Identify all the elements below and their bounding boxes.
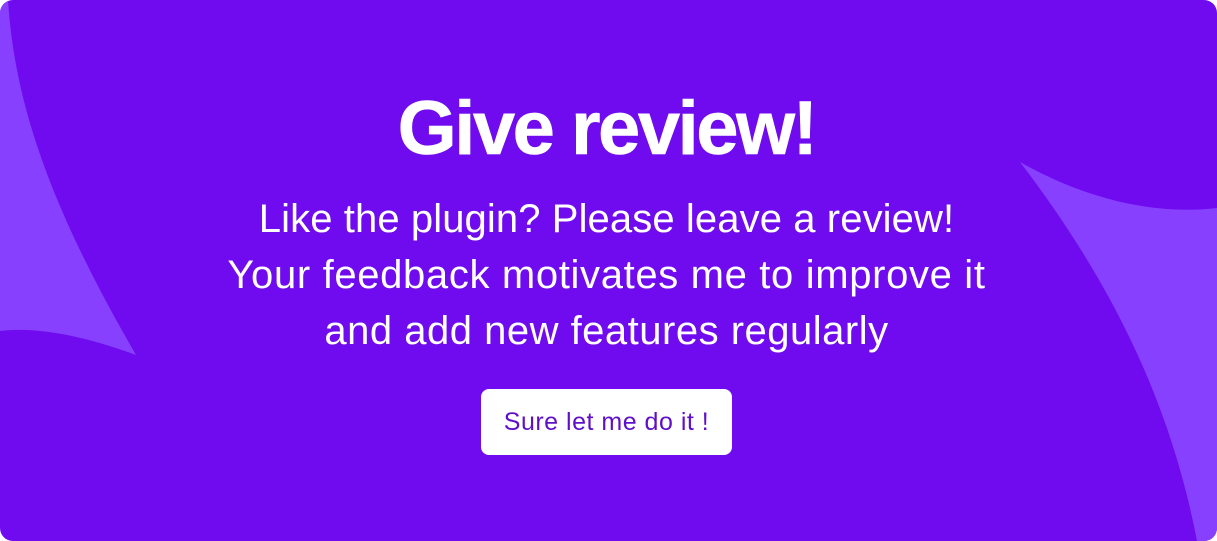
text block: message bbox=[227, 197, 986, 353]
title: Give review! bbox=[398, 86, 815, 171]
button bbox=[481, 389, 732, 455]
button: Sure let me do it ! bbox=[504, 408, 709, 436]
text block: message: and add new features regularly bbox=[324, 309, 889, 353]
text block: message: Your feedback motivates me to improve it bbox=[227, 253, 986, 297]
text block: message: Like the plugin? Please leave a review! bbox=[259, 197, 954, 241]
